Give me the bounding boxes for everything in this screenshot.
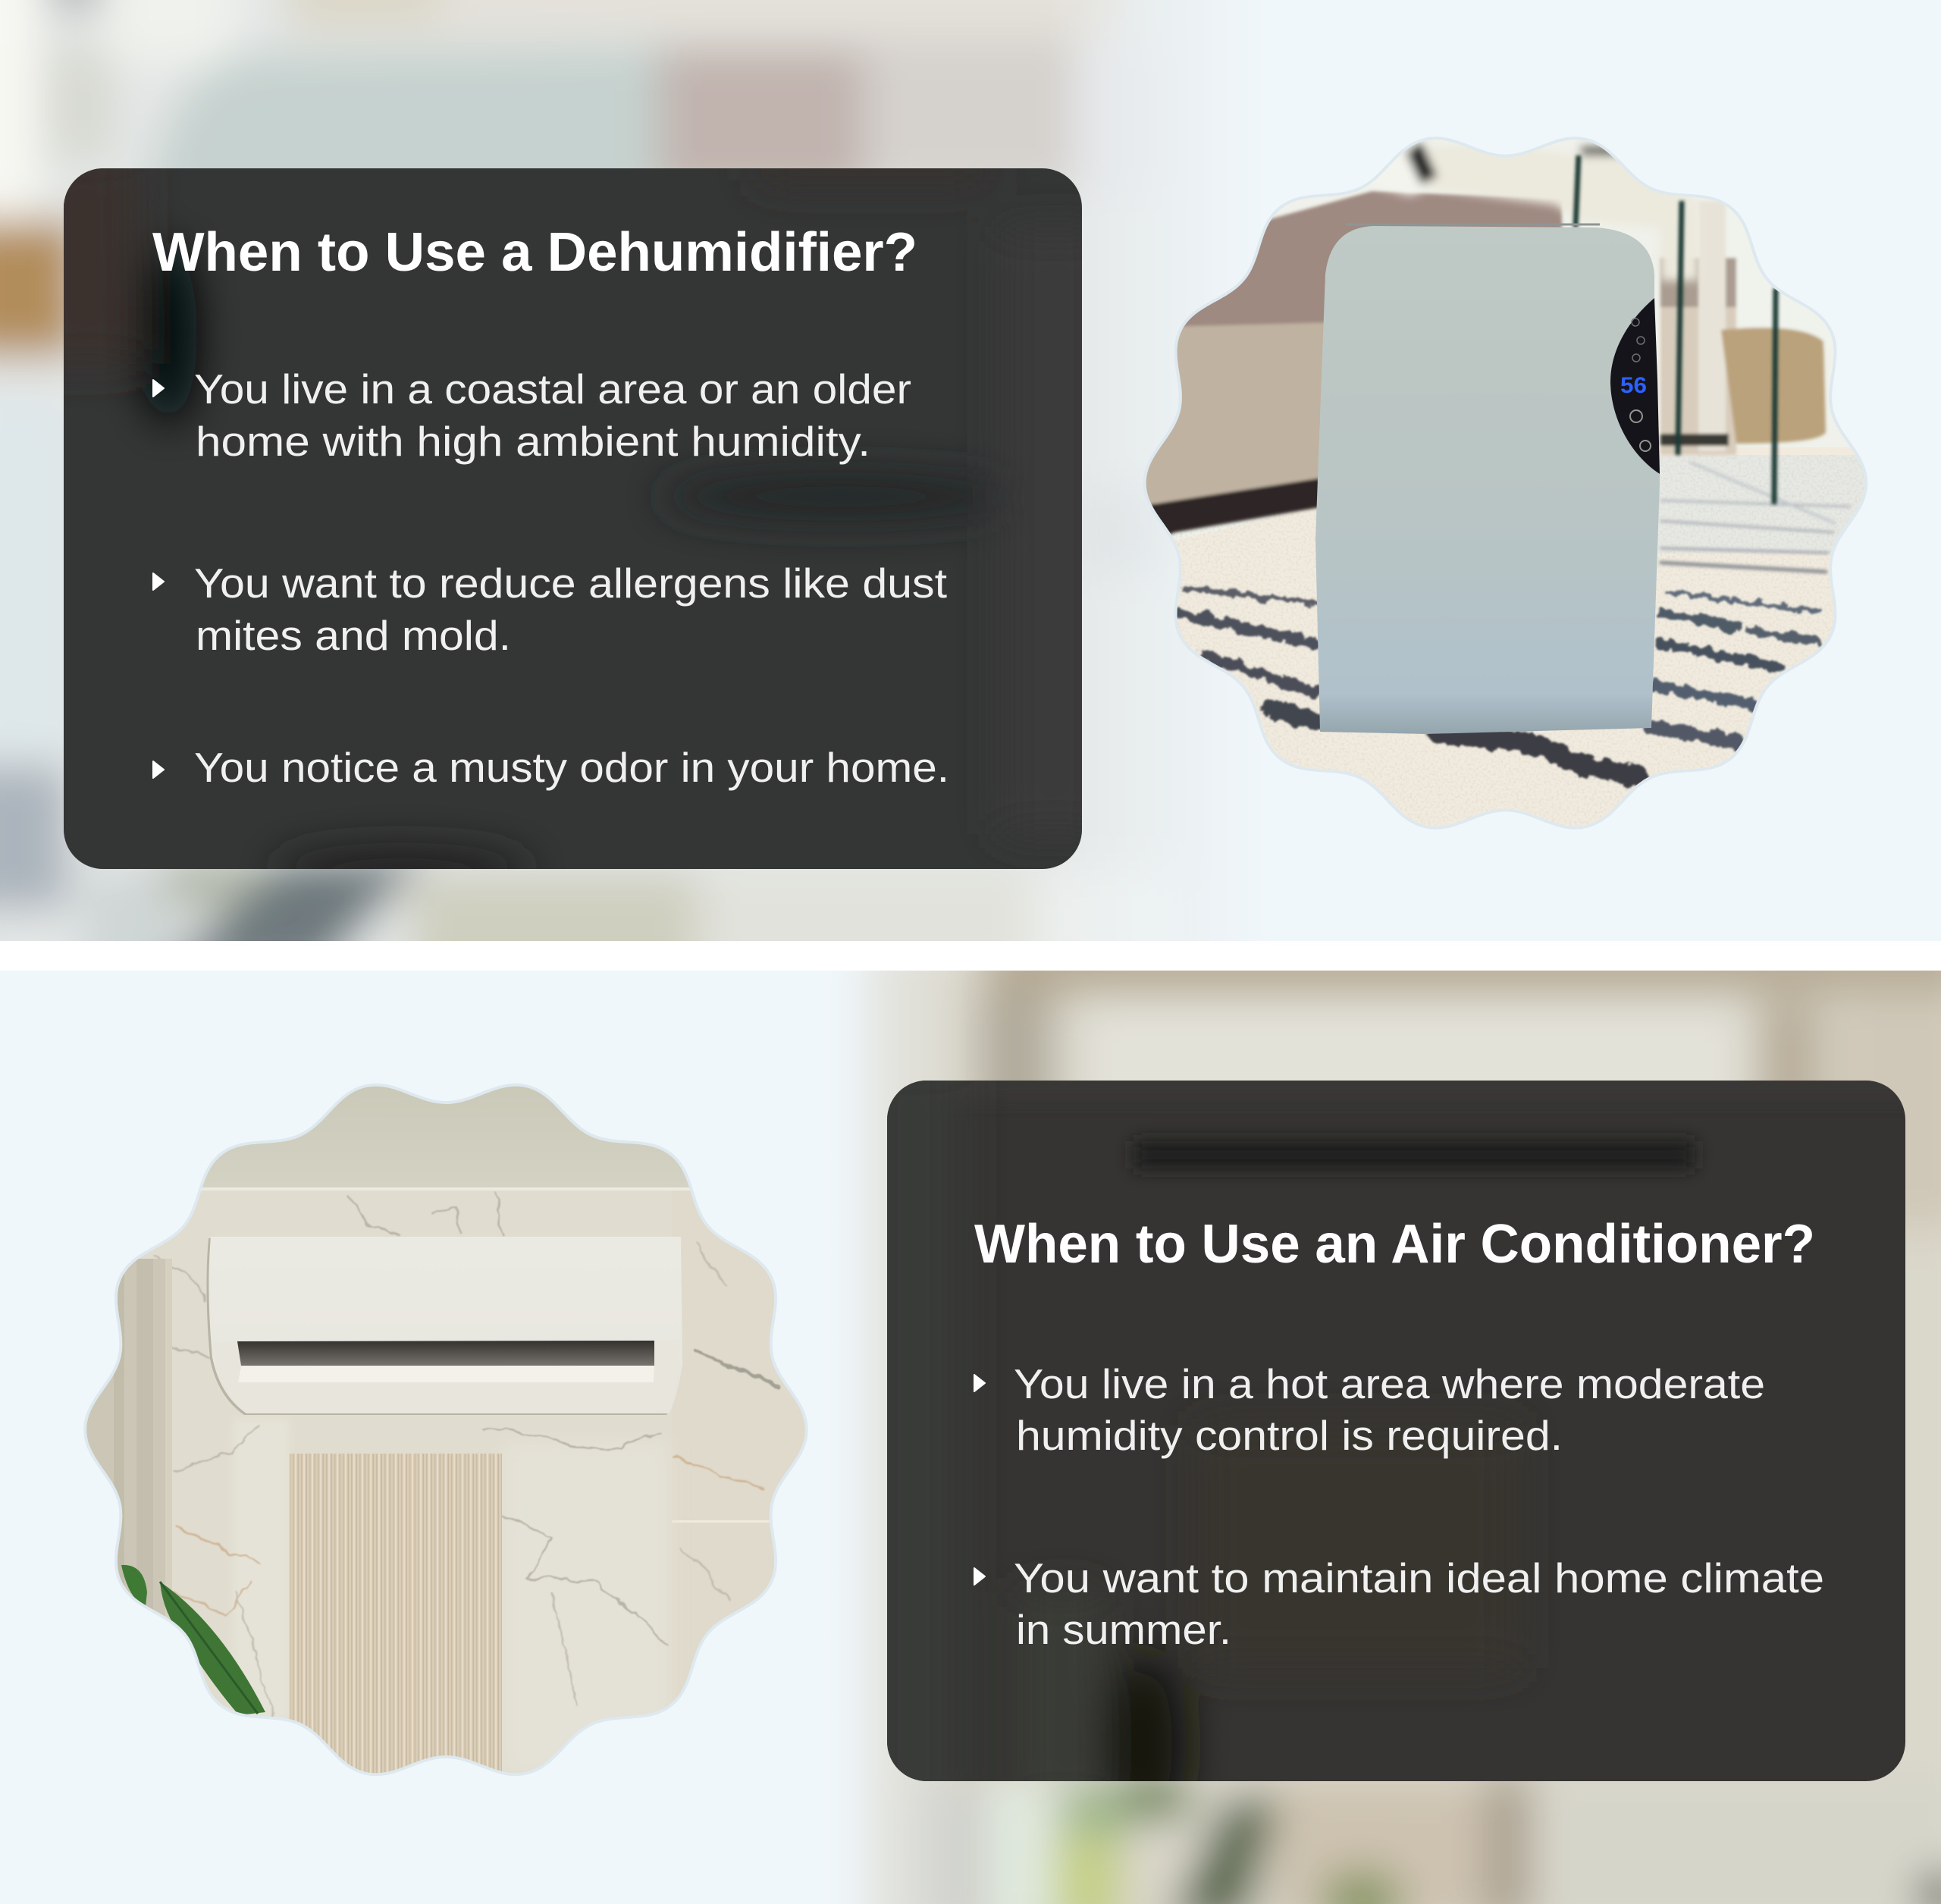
bullet item: allergens: mites and mold. [196, 612, 511, 659]
bullet item: home climate: in summer. [1016, 1606, 1231, 1653]
bullet item: musty odor: You notice a musty odor in your home. [194, 744, 949, 791]
ceiling ledge [68, 1062, 826, 1189]
control panel [1610, 298, 1660, 474]
bullet item: coastal area: You live in a coastal area or an older [194, 365, 911, 412]
air conditioner unit [206, 1237, 682, 1415]
rug stripes [1180, 588, 1820, 776]
control panel: 56 [1620, 373, 1647, 398]
marble veins [155, 1191, 779, 1736]
wall and right-hand sofa [1658, 201, 1828, 456]
heading: air conditioner: When to Use an Air Conditioner? [974, 1214, 1815, 1275]
marble sections [672, 1190, 826, 1790]
rug [1175, 447, 1855, 827]
blanket and legs [1350, 144, 1698, 281]
rug far thin lines [1661, 463, 1850, 572]
panel: dehumidifier card [64, 168, 1082, 869]
bullet item: home climate [974, 1554, 1824, 1653]
leaves [121, 1565, 265, 1715]
bullet item: hot area: humidity control is required. [1016, 1412, 1563, 1459]
bullet item: hot area [974, 1360, 1765, 1459]
panel: top section blurred room background [0, 0, 1941, 993]
bullet item: hot area: You live in a hot area where moderate [1014, 1360, 1765, 1407]
unit body [1315, 226, 1660, 734]
photo: dehumidifier in scalloped frame [1122, 121, 1880, 849]
bullet item: coastal area [153, 365, 911, 465]
bullet item: home climate: You want to maintain ideal home climate [1014, 1554, 1824, 1601]
photo: air conditioner in scalloped frame [68, 1062, 826, 1790]
left sofa [1137, 191, 1562, 546]
striped wall panel [290, 1454, 502, 1787]
panel: bottom section blurred room background [0, 933, 1941, 1904]
bullet item: allergens [153, 560, 947, 659]
heading: dehumidifier: When to Use a Dehumidifier? [152, 222, 917, 283]
panel: air conditioner card [864, 1062, 1918, 1835]
curtain [68, 1259, 172, 1714]
bullet item: allergens: You want to reduce allergens like dust [194, 560, 947, 607]
bullet item: coastal area: home with high ambient humidity. [196, 418, 870, 465]
